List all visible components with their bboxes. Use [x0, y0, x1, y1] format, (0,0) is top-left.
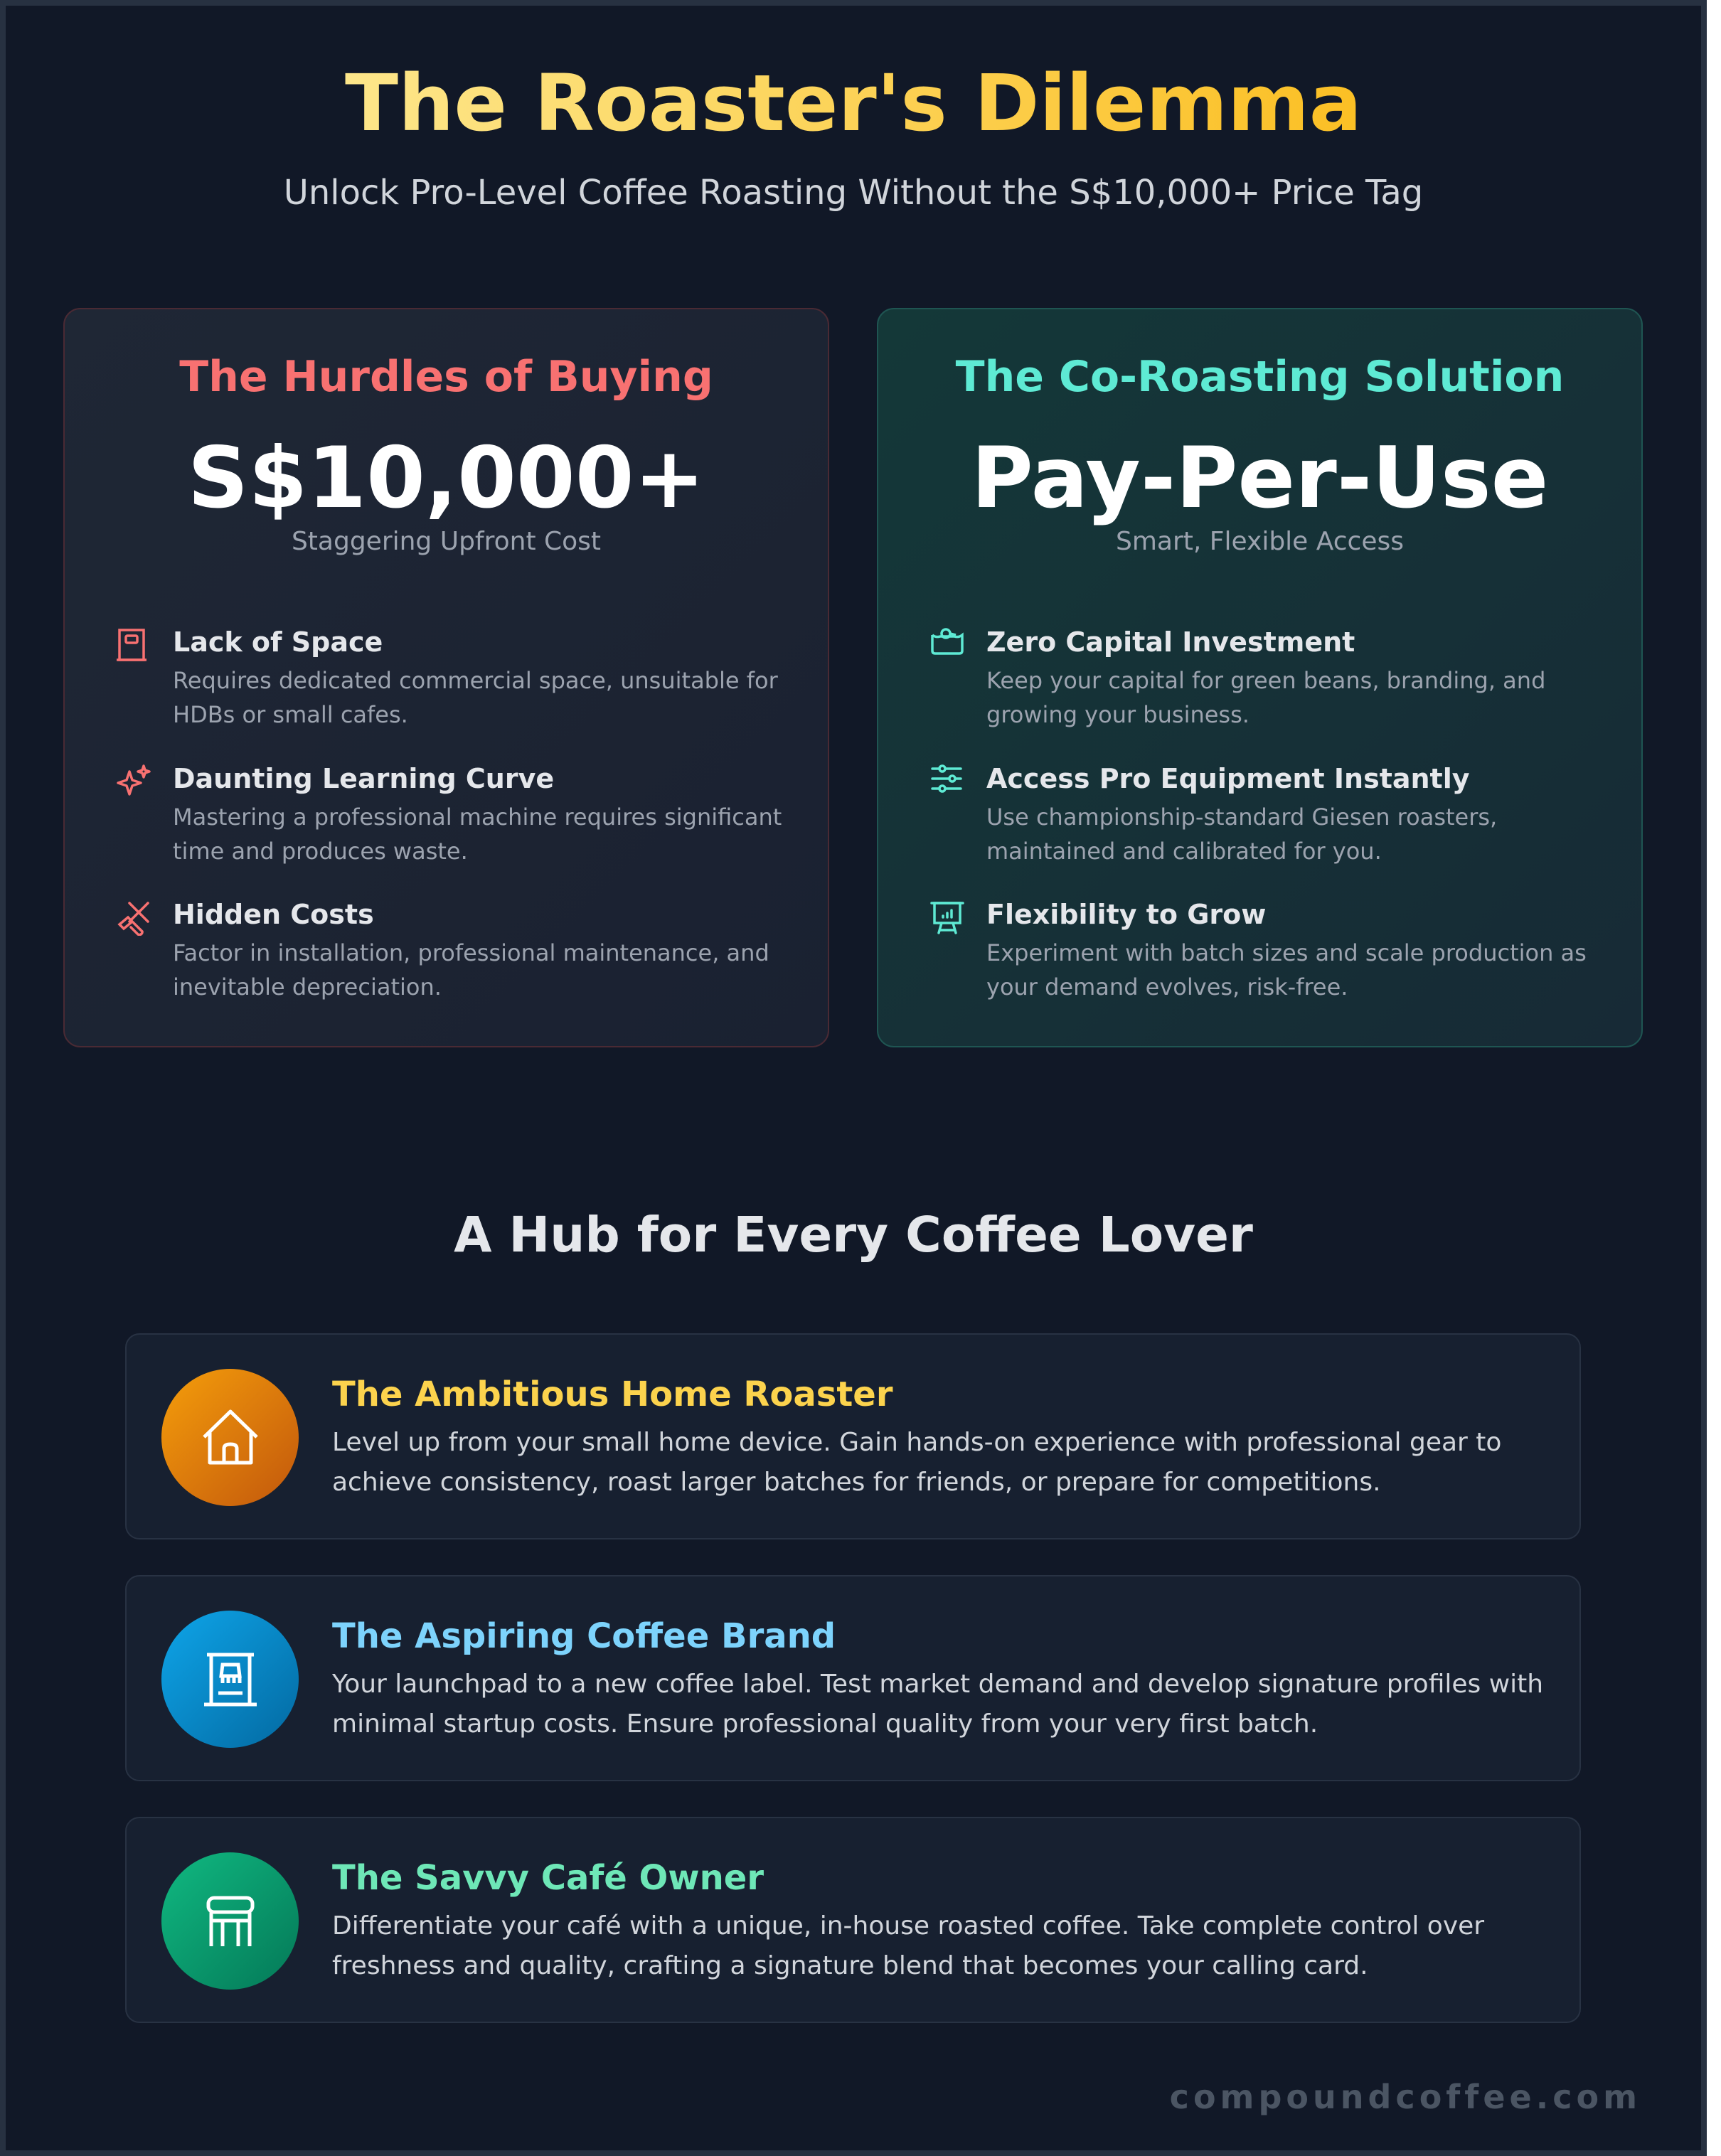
icon: door — [117, 629, 146, 661]
item: flexibility: Experiment with batch sizes and scale production as your demand evolves, risk-free. — [986, 939, 1587, 1000]
panel heading: solution: The Co-Roasting Solution — [956, 352, 1564, 402]
item: pro equipment: Use championship-standard Giesen roasters, maintained and calibrated for you. — [986, 804, 1497, 865]
item: lack of space: Lack of Space — [173, 626, 383, 658]
footer: website: compoundcoffee.com — [1170, 2078, 1641, 2116]
icon: wallet — [931, 628, 964, 655]
item: zero capital: Keep your capital for green beans, branding, and growing your business. — [986, 667, 1545, 728]
item: hidden costs: Factor in installation, professional maintenance, and inevitable depreciation. — [173, 939, 769, 1000]
panel heading: hurdles: The Hurdles of Buying — [179, 352, 713, 402]
icon: house circle — [161, 1369, 299, 1506]
caption: upfront cost: Staggering Upfront Cost — [292, 527, 601, 556]
item: learning curve — [117, 763, 782, 865]
item: hidden costs: Hidden Costs — [173, 899, 374, 930]
item: lack of space: Requires dedicated commercial space, unsuitable for HDBs or small cafes. — [173, 667, 778, 728]
item: pro equipment: Access Pro Equipment Instantly — [986, 763, 1470, 794]
panel: co-roasting solution — [877, 308, 1643, 1047]
item: lack of space — [117, 626, 778, 728]
card: cafe owner — [125, 1817, 1581, 2023]
item: flexibility: Flexibility to Grow — [986, 899, 1266, 930]
icon: stool circle — [161, 1852, 299, 1990]
item: learning curve: Daunting Learning Curve — [173, 763, 554, 794]
panel: hurdles of buying — [63, 308, 829, 1047]
big text: pay-per-use: Pay-Per-Use — [971, 429, 1548, 528]
card: coffee brand — [125, 1575, 1581, 1781]
card: cafe owner: The Savvy Café Owner — [332, 1858, 764, 1898]
icon: sparkles — [117, 764, 151, 796]
item: hidden costs — [118, 899, 769, 1000]
item: learning curve: Mastering a professional machine requires significant time and produces waste. — [173, 804, 782, 865]
item: zero capital: Zero Capital Investment — [986, 626, 1355, 658]
item: flexibility — [930, 899, 1587, 1000]
card: home roaster: The Ambitious Home Roaster — [332, 1375, 893, 1414]
item: pro equipment — [931, 763, 1497, 865]
caption: flexible access: Smart, Flexible Access — [1116, 527, 1404, 556]
subtitle: Unlock Pro-Level Coffee Roasting Without the S$10,000+ Price Tag — [284, 173, 1423, 213]
icon: tools — [118, 902, 149, 936]
card: home roaster: Level up from your small home device. Gain hands-on experience with professional gear to achieve consistency, roast larger batches for friends, or prepare for competitions. — [332, 1428, 1501, 1497]
icon: presentation chart — [930, 902, 964, 934]
icon: sliders — [931, 764, 962, 793]
section heading: A Hub for Every Coffee Lover — [454, 1207, 1253, 1264]
card: cafe owner: Differentiate your café with a unique, in-house roasted coffee. Take complete control over freshness and quality, crafting a signature blend that becomes your calling card. — [332, 1911, 1484, 1980]
card: coffee brand: Your launchpad to a new coffee label. Test market demand and develop signature profiles with minimal startup costs. Ensure professional quality from your very first batch. — [332, 1670, 1543, 1739]
title: The Roaster's Dilemma — [345, 58, 1362, 149]
big number: S$10,000+: S$10,000+ — [188, 429, 705, 528]
item: zero capital — [931, 626, 1545, 728]
icon: storefront circle — [161, 1611, 299, 1748]
card: home roaster — [125, 1333, 1581, 1539]
card: coffee brand: The Aspiring Coffee Brand — [332, 1616, 836, 1656]
